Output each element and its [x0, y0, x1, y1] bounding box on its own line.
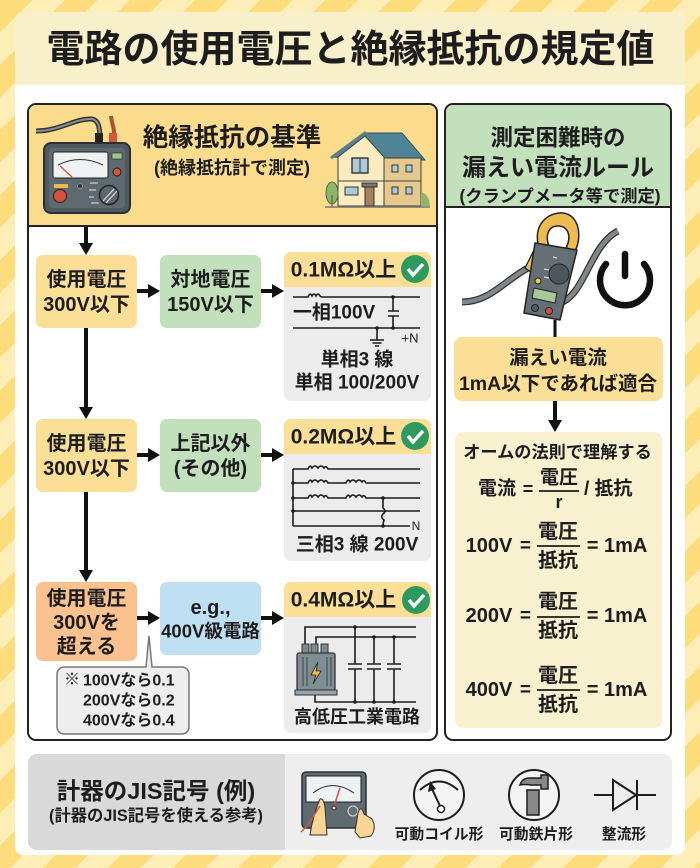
circuit: three phase	[291, 466, 420, 533]
arrow	[79, 227, 93, 255]
result card: 0.2 megohm: 三相3 線 200V	[296, 534, 419, 556]
label: moving iron: 可動鉄片形	[499, 825, 573, 843]
icon: check	[401, 422, 429, 450]
box: ground voltage 150V or less: 150V以下	[167, 294, 254, 316]
formula: general: 電圧	[540, 468, 578, 488]
circuit: single phase: +N	[402, 330, 418, 346]
box: 400V class	[160, 582, 261, 655]
panel: leakage current rule	[445, 104, 671, 740]
formula: 400V: 抵抗	[538, 693, 578, 716]
subheading: (絶縁抵抗計で測定)	[154, 158, 310, 178]
icon: clamp meter	[462, 213, 618, 320]
callout note: 400Vなら0.4	[83, 712, 175, 730]
box: voltage 300V or less	[36, 255, 137, 328]
box: ground voltage 150V or less: 対地電圧	[170, 268, 250, 291]
box: voltage 300V or less: 300V以下	[43, 294, 130, 316]
formula: 400V: = 1mA	[587, 679, 647, 701]
panel header: leakage current: (クランプメータ等で測定)	[459, 186, 661, 206]
result card: 0.4 megohm: 0.4MΩ以上	[291, 588, 396, 612]
formula: general: / 抵抗	[584, 478, 633, 500]
result card: 0.4 megohm: 高低圧工業電路	[294, 707, 420, 727]
box: other: (その他)	[174, 457, 247, 480]
arrow	[79, 328, 93, 419]
box: voltage above 300V	[36, 582, 137, 661]
formula: 100V: 電圧	[538, 521, 578, 543]
icon: insulation tester	[36, 116, 130, 213]
formula: 200V: 200V	[466, 605, 513, 627]
result card: 0.1 megohm: 単相3 線	[321, 348, 393, 370]
result card: 0.2 megohm: 0.2MΩ以上	[291, 426, 396, 448]
label: moving coil: 可動コイル形	[395, 826, 484, 843]
formula: 200V: 抵抗	[538, 619, 578, 642]
icon: check	[402, 586, 430, 614]
arrow	[261, 611, 284, 625]
arrow	[137, 284, 160, 298]
circuit: single phase: 一相100V	[293, 302, 376, 324]
formula: 200V	[466, 591, 647, 642]
arrow	[137, 611, 160, 625]
box: 400V class: e.g.,	[190, 597, 231, 619]
heading: オームの法則で理解する	[463, 442, 652, 462]
box: 400V class: 400V級電路	[161, 620, 260, 642]
formula: 400V: 電圧	[538, 665, 578, 687]
formula: 100V: = 1mA	[587, 535, 647, 557]
panel header: leakage current	[445, 105, 671, 207]
heading: 計器のJIS記号 (例)	[57, 778, 255, 804]
panel header: leakage current: 測定困難時の	[490, 126, 626, 150]
title	[15, 12, 685, 85]
arrow	[137, 448, 160, 462]
icon: moving coil symbol	[414, 770, 464, 820]
result card: 0.4 megohm	[284, 582, 431, 733]
formula: general: r	[555, 492, 563, 512]
panel: JIS symbols	[28, 754, 672, 850]
formula: 100V: 100V	[466, 535, 513, 557]
panel header: leakage current: 漏えい電流ルール	[462, 154, 654, 182]
box: ground voltage 150V or less	[160, 255, 261, 328]
subheading: (計器のJIS記号を使える参考)	[49, 806, 263, 825]
circuit: three phase: N	[412, 519, 420, 533]
arrow	[261, 284, 284, 298]
box: voltage above 300V: 使用電圧	[46, 587, 126, 610]
formula: 200V: = 1mA	[587, 605, 647, 627]
box: voltage above 300V: 300Vを	[53, 611, 120, 634]
formula: general: 電流	[478, 478, 516, 500]
formula: 100V: 抵抗	[538, 549, 578, 572]
title: 電路の使用電圧と絶縁抵抗の規定値	[46, 29, 655, 71]
formula: 400V: =	[520, 680, 531, 700]
heading: 絶縁抵抗の基準	[143, 124, 321, 152]
arrow	[554, 320, 556, 338]
arrow	[261, 448, 284, 462]
result card: 0.1 megohm: 0.1MΩ以上	[291, 258, 396, 282]
box: voltage 300V or less: 使用電圧	[46, 268, 126, 291]
arrow	[79, 492, 93, 582]
box: leakage current criterion: 1mA以下であれば適合	[459, 373, 658, 395]
circuit: single phase	[293, 294, 420, 346]
panel: insulation resistance standard	[28, 104, 437, 740]
formula: 200V: 電圧	[538, 591, 578, 613]
arrow	[548, 401, 562, 432]
box: voltage 300V or less, second: 使用電圧	[46, 432, 126, 455]
callout note	[57, 636, 189, 734]
result card: 0.1 megohm: 単相 100/200V	[295, 372, 420, 394]
result card: 0.1 megohm	[284, 252, 431, 401]
box: voltage above 300V: 超える	[57, 635, 116, 658]
icon: power symbol	[600, 254, 650, 305]
box: leakage current criterion: 漏えい電流	[509, 347, 607, 369]
icon: house	[325, 133, 430, 207]
box: voltage 300V or less, second	[36, 419, 137, 492]
formula: general	[478, 468, 633, 512]
callout note: 200Vなら0.2	[83, 692, 175, 710]
icon: moving iron symbol	[509, 770, 559, 820]
formula: 400V	[466, 665, 647, 716]
result card: 0.2 megohm	[284, 419, 431, 561]
icon: meter with hands	[301, 772, 374, 838]
formula: 400V: 400V	[466, 679, 513, 701]
panel header: insulation resistance	[28, 105, 437, 226]
panel: Ohm's law	[455, 432, 662, 728]
box: other: 上記以外	[170, 432, 250, 455]
formula: 100V: =	[520, 536, 531, 556]
callout note: ※	[64, 672, 80, 688]
icon: rectifier symbol	[594, 780, 656, 810]
callout note: 100Vなら0.1	[83, 672, 175, 690]
box: leakage current criterion	[454, 337, 663, 401]
box: other	[160, 419, 261, 492]
formula: general: =	[523, 479, 533, 499]
box: voltage 300V or less, second: 300V以下	[43, 458, 130, 480]
label: rectifier: 整流形	[602, 825, 646, 843]
circuit: transformer	[295, 625, 416, 704]
formula: 200V: =	[520, 606, 531, 626]
icon: check	[401, 255, 429, 283]
formula: 100V	[466, 521, 647, 572]
